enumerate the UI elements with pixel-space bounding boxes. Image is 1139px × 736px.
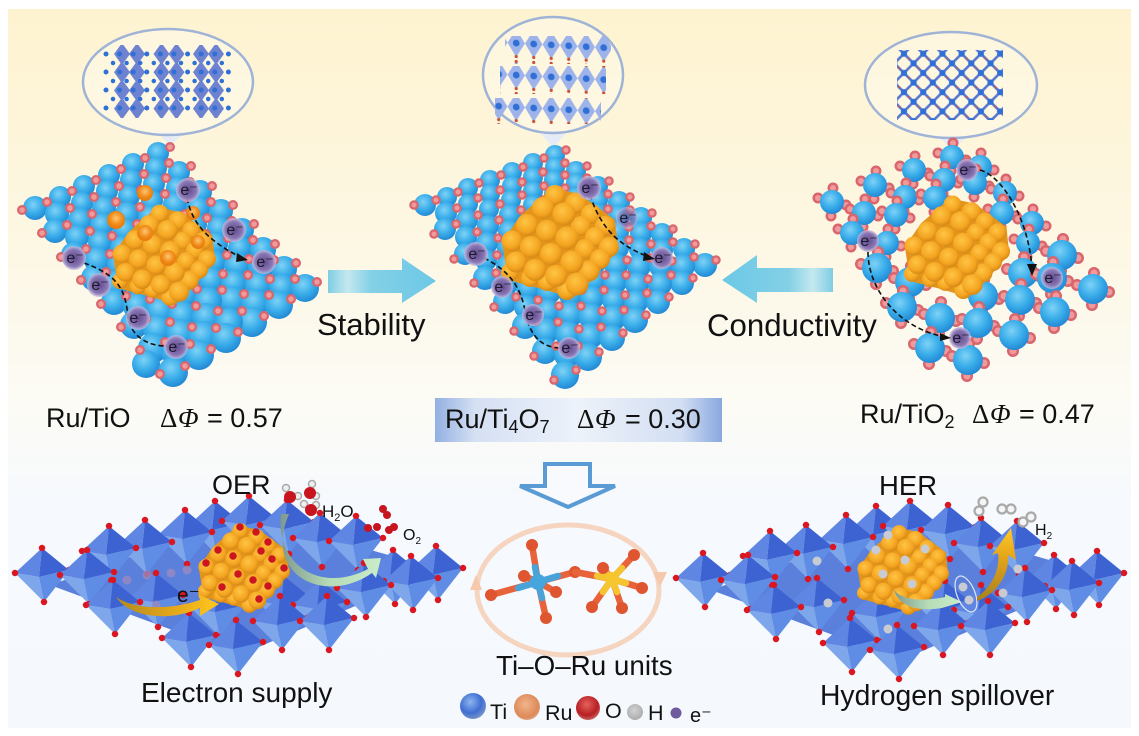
label: H2O: 2 — [334, 512, 340, 524]
label: O2: O — [403, 527, 415, 544]
Ru cluster with H — [857, 525, 949, 615]
arrow: stability — [328, 258, 436, 303]
O atoms on Ru — [206, 527, 284, 599]
electrons: e⁻ — [468, 246, 486, 263]
inset: TiO2 crystal lens — [865, 32, 1037, 150]
electrons: e⁻ — [860, 233, 878, 250]
label: Ru/TiO2 work function: = 0.47 — [1019, 399, 1095, 429]
legend: Ru: Ru — [545, 701, 572, 725]
label: H2: 2 — [1047, 531, 1053, 542]
label: H2: H — [1035, 522, 1047, 539]
electrons: e⁻ — [91, 277, 109, 294]
highlight band — [435, 398, 722, 442]
panel: HER slab — [676, 470, 1124, 711]
electrons: e⁻ — [129, 310, 147, 327]
legend: e-: e⁻ — [690, 705, 712, 727]
Ti atoms lattice — [414, 145, 717, 389]
H atoms — [817, 535, 1018, 629]
Ti octahedral centre — [491, 545, 575, 618]
legend: H: H — [648, 701, 664, 725]
Ti atoms lattice — [23, 142, 319, 387]
legend: O — [576, 696, 622, 723]
O atoms lattice — [414, 150, 716, 380]
electrons — [62, 178, 276, 359]
water molecules — [282, 480, 320, 516]
label: Ru/Ti4O7 work function: O — [519, 404, 540, 434]
label: Ru/Ti4O7 work function: Ru/Ti — [445, 404, 509, 434]
panel: Ti-O-Ru unit — [470, 525, 667, 655]
arrow: H2 release — [977, 528, 1016, 601]
TiO6 units lattice — [818, 143, 1109, 376]
inset: TiO crystal lens — [83, 29, 253, 146]
electrons: e⁻ — [525, 307, 543, 324]
electrons: e⁻ — [581, 180, 599, 197]
Ru cluster — [501, 185, 619, 300]
label: stability: Stability — [317, 307, 426, 342]
panel: Ru/Ti4O7 model — [414, 17, 717, 389]
electrons: e⁻ — [494, 279, 512, 296]
legend: Ti — [460, 693, 507, 724]
label: Ru/Ti4O7 work function: 4 — [509, 417, 519, 437]
electron path arrows — [868, 170, 1032, 337]
label: Ru/TiO2 work function: Δ — [972, 399, 989, 429]
panel: OER slab — [15, 470, 463, 708]
electrons: e⁻ — [561, 340, 579, 357]
legend: O: O — [605, 699, 622, 723]
electrons: e⁻ — [226, 222, 244, 239]
label: Ru/TiO work function: = 0.57 — [207, 403, 283, 433]
legend: H — [627, 701, 664, 725]
arrow: conductivity — [722, 255, 833, 303]
label: Ru/TiO work function: Δ — [160, 403, 177, 433]
label: Ru/Ti4O7 work function: = 0.30 — [625, 404, 701, 434]
arrow: electron supply — [116, 594, 219, 616]
legend — [460, 693, 712, 727]
label: Ru/TiO2 work function: Ru/TiO — [860, 399, 945, 429]
electrons: e⁻ — [256, 254, 274, 271]
label: O2: 2 — [415, 536, 421, 547]
arrow: spillover green — [894, 590, 962, 609]
Ru cluster with O — [198, 523, 290, 613]
electrons: e⁻ — [180, 182, 198, 199]
octahedra slab — [676, 501, 1124, 679]
electron path arrows — [484, 195, 652, 348]
label: Ru/TiO work function: Φ — [178, 403, 199, 433]
dispersed Ru atoms — [107, 185, 205, 266]
label: Ru/Ti4O7 work function: 7 — [540, 417, 550, 437]
electrons: e⁻ — [959, 162, 977, 179]
electrons: e⁻ — [168, 339, 186, 356]
octahedra slab — [15, 496, 463, 674]
label: Ti-O-Ru units: Ti–O–Ru units — [496, 650, 673, 681]
O2 molecules — [368, 509, 394, 530]
electrons on slab — [127, 570, 205, 607]
panel: Ru/TiO model — [22, 29, 319, 387]
label: e-: e⁻ — [177, 584, 200, 607]
electrons — [857, 159, 1063, 349]
ring with arrowheads — [470, 525, 667, 655]
label: H2O: O — [340, 502, 354, 521]
electrons: e⁻ — [619, 210, 637, 227]
inset: Ti4O7 crystal lens — [483, 17, 623, 148]
electrons: e⁻ — [66, 250, 84, 267]
O atoms lattice — [22, 147, 317, 374]
label: Ru/Ti4O7 work function: Δ — [577, 404, 594, 434]
label: HER: HER — [879, 470, 937, 501]
label: H2O: H — [322, 502, 334, 521]
label: Ru/Ti4O7 work function: Φ — [595, 404, 616, 434]
label: Ru/TiO2 work function: Φ — [990, 399, 1011, 429]
legend: Ru — [514, 694, 572, 725]
label: Ru/TiO work function: Ru/TiO — [46, 403, 131, 433]
label: electron supply: Electron supply — [141, 677, 332, 708]
label: OER: OER — [212, 470, 271, 500]
electrons: e⁻ — [952, 330, 970, 347]
label: Ru/TiO2 work function: 2 — [945, 412, 955, 432]
label: conductivity: Conductivity — [707, 308, 877, 343]
arrow: hollow down arrow — [520, 464, 615, 507]
legend: Ti: Ti — [490, 700, 507, 724]
arrow: OER green — [281, 514, 381, 586]
panel: Ru/TiO2 model — [818, 32, 1109, 376]
adsorbed H ring — [951, 573, 981, 615]
electrons: e⁻ — [1044, 270, 1062, 287]
H2 molecules — [974, 498, 1036, 526]
electron path arrows — [84, 198, 246, 346]
Ru cluster — [112, 205, 216, 306]
Ru octahedral centre — [575, 555, 642, 608]
Ru cluster — [904, 196, 1010, 299]
electrons — [464, 176, 673, 359]
legend: e- — [670, 705, 712, 727]
label: hydrogen spillover: Hydrogen spillover — [820, 679, 1054, 711]
electrons: e⁻ — [654, 250, 672, 267]
